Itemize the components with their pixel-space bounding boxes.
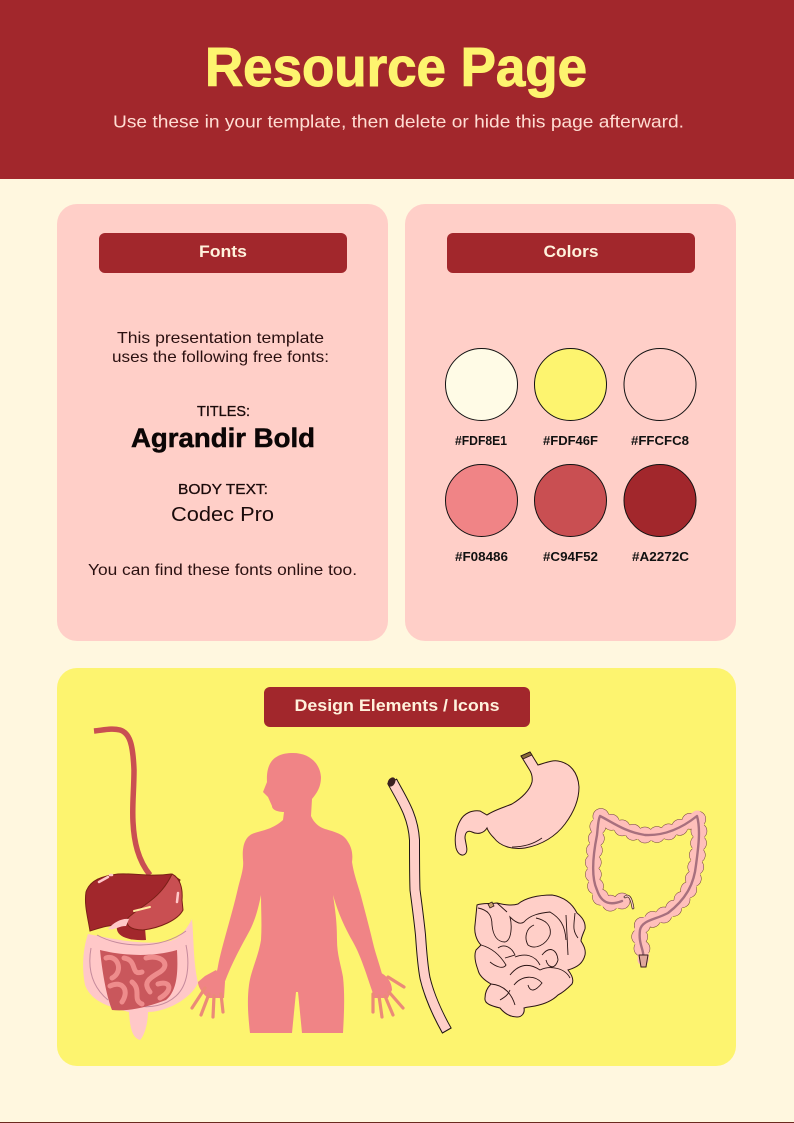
tube opening [386, 776, 397, 788]
intestine folds [106, 957, 169, 1004]
pale highlight [134, 907, 150, 911]
swatch: A2272C [624, 464, 696, 564]
right hand [368, 972, 404, 1017]
stomach opening [521, 752, 532, 759]
body text label: BODY TEXT: [178, 482, 268, 498]
design elements heading [264, 687, 530, 727]
title: Resource Page [205, 36, 587, 98]
liver [85, 874, 180, 932]
intestine opening [488, 902, 494, 908]
duodenum [117, 918, 146, 940]
titles label: TITLES: [197, 404, 250, 420]
intro text: This presentation template [117, 330, 324, 347]
swatch: C94F52 [534, 464, 606, 564]
panel: fonts [57, 204, 388, 641]
swatch: FDF46F [534, 348, 606, 448]
icon: human silhouette [192, 753, 404, 1033]
colon body [593, 816, 699, 960]
swatch: FDF46F: #FDF46F [543, 434, 598, 448]
icon: small intestine [475, 895, 585, 1017]
swatch: F08486 [446, 464, 518, 564]
inner colon line [90, 931, 188, 1007]
subtitle: Use these in your template, then delete or hide this page afterward. [113, 112, 684, 132]
swatch: C94F52: #C94F52 [543, 550, 598, 564]
icon: stomach [455, 752, 579, 855]
colors heading: Colors [544, 242, 598, 261]
appendix [625, 896, 633, 908]
large intestine [83, 919, 198, 1040]
swatch: FDF8E1: #FDF8E1 [455, 434, 507, 448]
esophagus [94, 729, 150, 875]
swatch: FFCFC8 [624, 348, 696, 448]
gall bladder [108, 919, 129, 929]
icon: large intestine [593, 816, 699, 967]
small intestine [100, 950, 177, 1010]
colon inner band [593, 816, 699, 960]
liver highlight [99, 875, 112, 882]
swatch: FFCFC8: #FFCFC8 [631, 434, 689, 448]
panel: colors [405, 204, 736, 641]
fonts heading [99, 233, 347, 273]
icon: digestive system [83, 729, 198, 1040]
titles font name: Agrandir Bold [131, 423, 315, 453]
fonts heading: Fonts [199, 242, 247, 261]
colors heading [447, 233, 695, 273]
header band [0, 0, 794, 179]
panel: design elements [57, 668, 736, 1066]
icon: esophagus tube [386, 776, 447, 1031]
rectum end [639, 955, 648, 967]
torso and head [212, 753, 382, 1033]
stomach fold [512, 838, 542, 847]
stomach [127, 874, 183, 930]
design elements heading: Design Elements / Icons [294, 696, 500, 715]
intestine folds [478, 903, 578, 1005]
intro text: uses the following free fonts: [112, 349, 329, 366]
colon outline [593, 816, 699, 960]
swatch: F08486: #F08486 [455, 550, 508, 564]
intro text [112, 330, 329, 366]
stomach highlight [177, 893, 178, 902]
swatch: A2272C: #A2272C [632, 550, 689, 564]
body font name: Codec Pro [171, 504, 274, 526]
left hand [192, 970, 225, 1017]
swatch: FDF8E1 [446, 348, 518, 448]
closing note: You can find these fonts online too. [88, 562, 357, 579]
